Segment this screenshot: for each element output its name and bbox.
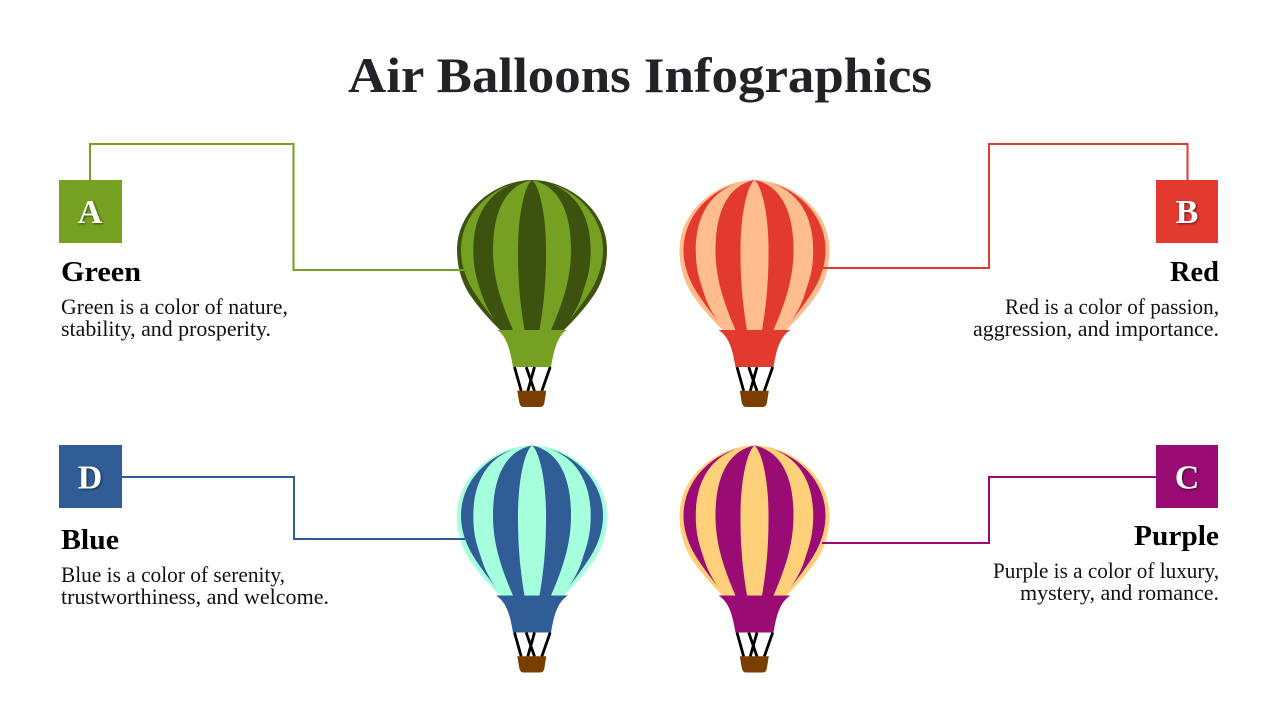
text: green description [61, 294, 288, 341]
badge D: D [78, 460, 102, 496]
text: blue description [61, 562, 329, 609]
connector: purple [822, 477, 1157, 543]
text: green description: stability, and prosperity. [61, 316, 271, 341]
badge A: A [78, 194, 103, 231]
connector: red [822, 144, 1188, 268]
balloon: green [457, 180, 607, 407]
title: Air Balloons Infographics [348, 47, 932, 103]
heading: red: Red [1170, 256, 1219, 288]
panel: green [59, 180, 288, 341]
badge A [59, 180, 122, 243]
panel: red [973, 180, 1219, 341]
badge B [1156, 180, 1218, 243]
text: purple description: mystery, and romance. [1020, 580, 1219, 605]
badge C [1156, 445, 1218, 508]
heading: purple: Purple [1134, 520, 1219, 552]
panel: purple [993, 445, 1219, 605]
text: blue description: trustworthiness, and welcome. [61, 584, 329, 609]
badge C: C [1175, 460, 1199, 496]
badge D [59, 445, 122, 508]
text: red description [973, 294, 1219, 341]
balloon: red [680, 180, 830, 407]
text: red description: aggression, and importance. [973, 316, 1219, 341]
badge B: B [1176, 194, 1198, 231]
text: purple description [993, 558, 1219, 605]
text: red description: Red is a color of passion, [1005, 294, 1219, 319]
text: green description: Green is a color of nature, [61, 294, 288, 319]
connector: blue [121, 477, 465, 539]
panel: blue [59, 445, 329, 609]
text: purple description: Purple is a color of luxury, [993, 558, 1219, 583]
heading: blue: Blue [61, 524, 119, 556]
balloon: purple [680, 446, 830, 672]
connector: green [90, 144, 465, 270]
balloon: blue [457, 446, 607, 672]
text: blue description: Blue is a color of serenity, [61, 562, 285, 587]
heading: green: Green [61, 256, 141, 288]
